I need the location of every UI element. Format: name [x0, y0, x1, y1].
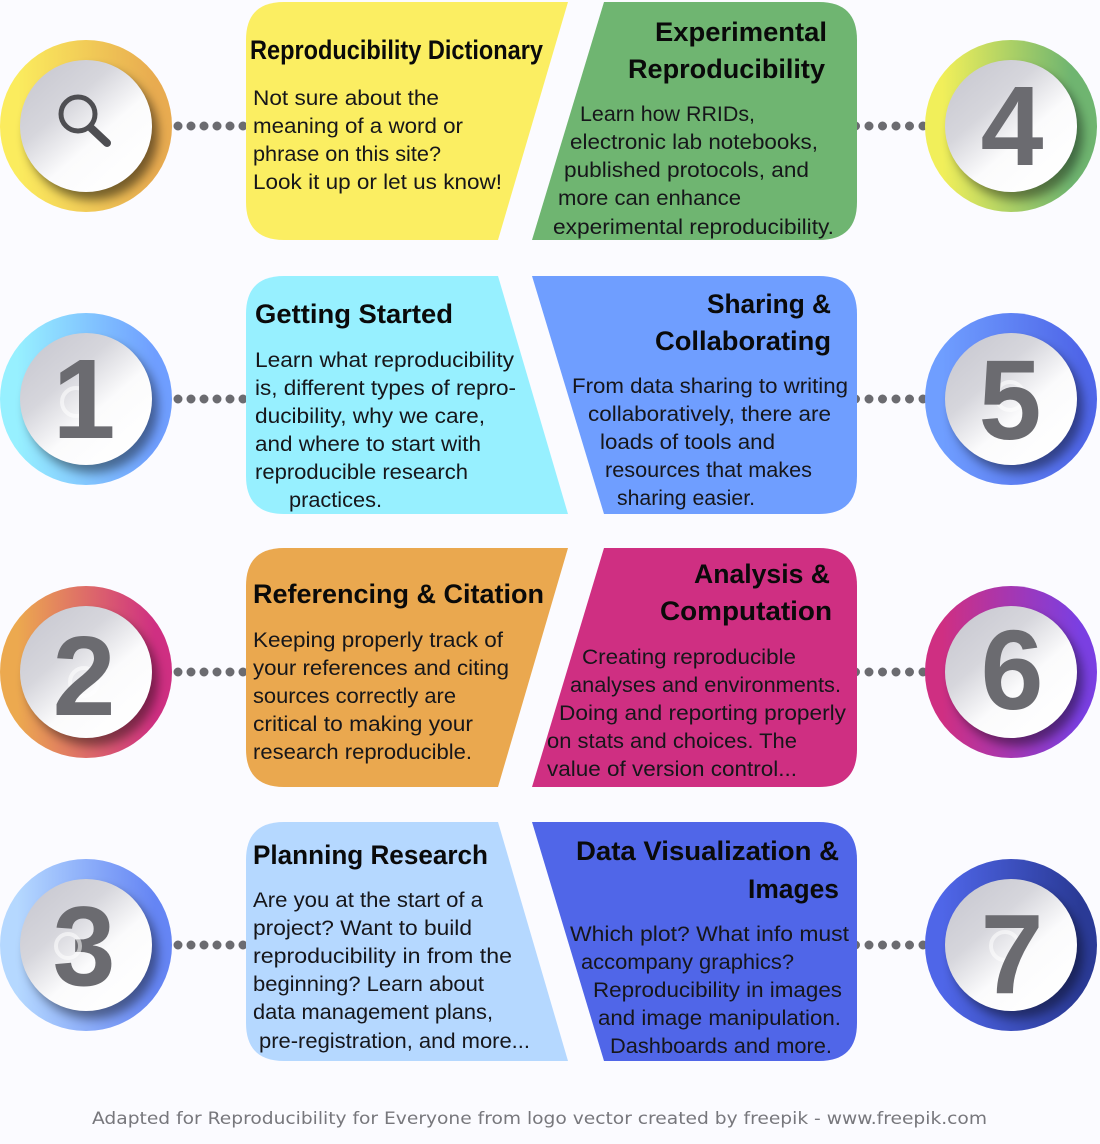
heading: Reproducibility — [628, 54, 825, 84]
heading: Data Visualization & — [576, 836, 839, 866]
heading — [628, 17, 827, 84]
body text: loads of tools and — [600, 431, 775, 454]
body text: on stats and choices. The — [547, 730, 797, 753]
body text: Learn how RRIDs, — [580, 103, 755, 126]
connector: step 3 — [178, 940, 246, 950]
body text: Keeping properly track of — [253, 629, 503, 652]
connector: step 7 — [856, 940, 925, 950]
badge: number 4: 4 — [981, 63, 1044, 189]
badge: number 1: 1 — [53, 336, 115, 462]
body text: critical to making your — [253, 713, 473, 736]
body text — [547, 646, 847, 781]
badge: number 6: 6 — [981, 607, 1043, 733]
panel: Analysis & Computation — [532, 548, 857, 787]
badge: number 3: 3 — [53, 883, 115, 1009]
body text: sources correctly are — [253, 685, 456, 708]
body text: is, different types of repro- — [255, 377, 516, 400]
body text: ducibility, why we care, — [255, 405, 485, 428]
body text: Which plot? What info must — [570, 923, 849, 946]
icon: magnifying glass — [61, 97, 107, 143]
badge: number 5: 5 — [979, 337, 1041, 463]
body text: and image manipulation. — [598, 1007, 841, 1030]
body text — [253, 629, 509, 764]
body text — [553, 103, 834, 239]
panel: Planning Research — [246, 822, 568, 1061]
body text — [570, 923, 849, 1058]
body text: and where to start with — [255, 433, 481, 456]
badge: magnifier — [0, 40, 172, 212]
body text — [253, 889, 530, 1053]
heading: Experimental — [655, 17, 827, 47]
heading: Sharing & — [707, 289, 831, 319]
panel: Sharing & Collaborating — [532, 276, 857, 514]
panel: Experimental Reproducibility — [532, 2, 857, 240]
body text: more can enhance — [558, 187, 741, 210]
badge: number 4 — [925, 40, 1097, 212]
body text: Learn what reproducibility — [255, 349, 515, 372]
badge: number 3 — [0, 859, 172, 1031]
body text — [255, 349, 516, 512]
body text: accompany graphics? — [581, 951, 794, 974]
badge: number 2 — [0, 586, 172, 758]
body text: Are you at the start of a — [253, 889, 483, 912]
heading — [576, 836, 839, 904]
heading: Planning Research — [253, 840, 488, 870]
body text: data management plans, — [253, 1001, 493, 1024]
badge: number 2: 2 — [53, 613, 115, 739]
body text — [572, 375, 848, 510]
body text: phrase on this site? — [253, 143, 441, 166]
badge: number 6 — [925, 586, 1097, 758]
body text: sharing easier. — [617, 487, 755, 510]
body text: reproducibility in from the — [253, 945, 512, 968]
connector: step 4 — [856, 122, 925, 130]
badge: number 7: 7 — [981, 891, 1043, 1017]
badge: number 1 — [0, 313, 172, 485]
body text: pre-registration, and more... — [259, 1030, 530, 1053]
body text: Doing and reporting properly — [559, 702, 847, 725]
heading: Images — [748, 874, 839, 904]
body text: Dashboards and more. — [610, 1035, 832, 1058]
body text: Look it up or let us know! — [253, 171, 502, 194]
body text: meaning of a word or — [253, 115, 463, 138]
badge: number 7 — [925, 859, 1097, 1031]
body text: project? Want to build — [253, 917, 472, 940]
heading: Getting Started — [255, 299, 453, 329]
panel: Getting Started — [246, 276, 568, 514]
body text: Creating reproducible — [582, 646, 796, 669]
heading: Reproducibility Dictionary — [250, 35, 543, 65]
heading: Referencing & Citation — [253, 579, 544, 609]
body text: resources that makes — [605, 459, 812, 482]
panel: Reproducibility Dictionary — [246, 2, 568, 240]
body text: practices. — [289, 489, 382, 512]
heading: Computation — [660, 596, 832, 626]
body text: From data sharing to writing — [572, 375, 848, 398]
body text: reproducible research — [255, 461, 468, 484]
heading: Collaborating — [655, 326, 831, 356]
connector: step 6 — [856, 668, 925, 676]
body text: collaboratively, there are — [588, 403, 831, 426]
body text: value of version control... — [547, 758, 797, 781]
connector: step 1 — [178, 394, 246, 404]
badge: number 5 — [925, 313, 1097, 485]
body text: Reproducibility in images — [593, 979, 842, 1002]
body text — [253, 87, 502, 194]
body text: electronic lab notebooks, — [570, 131, 818, 154]
panel: Data Visualization & Images — [532, 822, 857, 1061]
body text: Not sure about the — [253, 87, 439, 110]
body text: published protocols, and — [564, 159, 809, 182]
body text: experimental reproducibility. — [553, 216, 834, 239]
footer credit: Adapted for Reproducibility for Everyone from logo vector created by freepik - www.freepik.com — [92, 1109, 987, 1129]
panel: Referencing & Citation — [246, 548, 568, 787]
connector: dictionary — [178, 122, 246, 130]
body text: beginning? Learn about — [253, 973, 484, 996]
heading — [660, 559, 832, 626]
body text: research reproducible. — [253, 741, 472, 764]
connector: step 5 — [856, 394, 925, 404]
heading — [655, 289, 831, 356]
body text: your references and citing — [253, 657, 509, 680]
body text: analyses and environments. — [570, 674, 841, 697]
heading: Analysis & — [694, 559, 830, 589]
connector: step 2 — [178, 668, 246, 676]
